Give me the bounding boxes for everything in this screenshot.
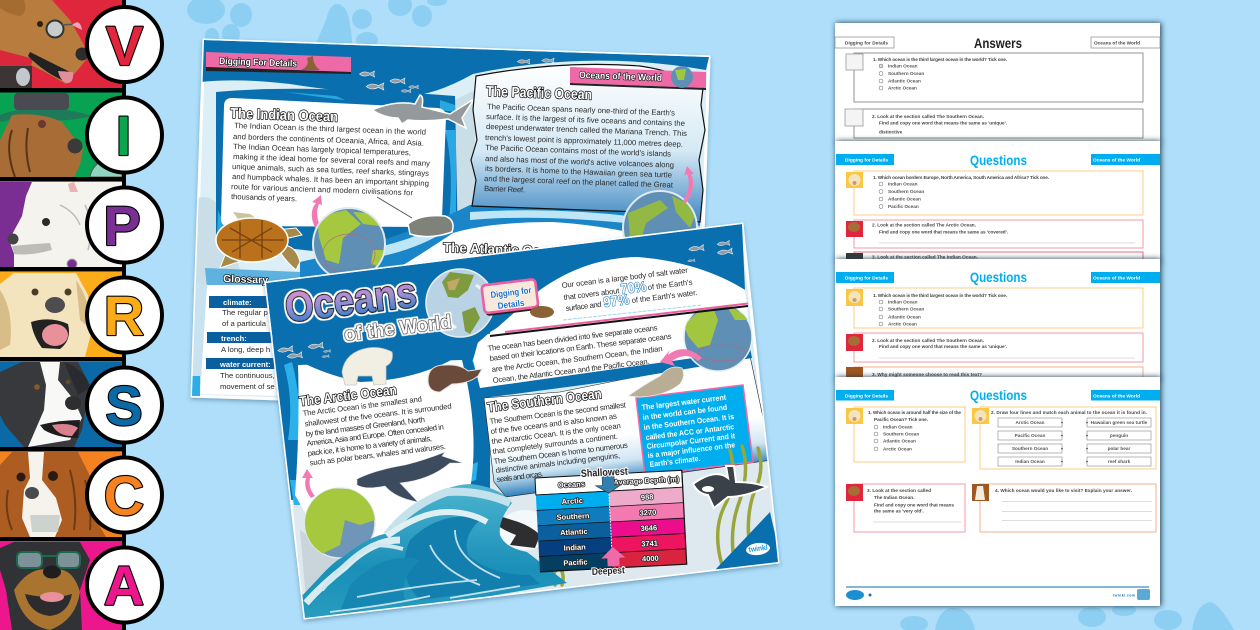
body text: pack ice, it is home to a variety of animals, bbox=[307, 434, 432, 458]
arrow: pink pointing left bbox=[660, 349, 702, 366]
question 2: matching: 2. Draw four lines and match each animal to the ocean it is found in. bbox=[991, 410, 1147, 415]
footer bbox=[846, 587, 1150, 600]
panel: VIPERS dog column bbox=[0, 0, 162, 630]
swirl frame behind Indian Ocean panel bbox=[216, 88, 458, 251]
question 1 bbox=[846, 288, 1143, 328]
text: ocean facts: 70% bbox=[619, 278, 648, 297]
badge S bbox=[87, 368, 162, 442]
badge: Digging for Details: Digging for bbox=[490, 285, 532, 300]
panel background bbox=[221, 98, 446, 227]
Atlantic Ocean white curve bbox=[404, 222, 624, 264]
question 1: Arctic Ocean bbox=[888, 322, 917, 326]
question 1: 1. Which ocean is around half the size of the bbox=[868, 410, 961, 415]
question 3 bbox=[846, 367, 1143, 381]
icon: kelp bbox=[553, 446, 761, 585]
tab: Digging for Details bbox=[836, 154, 894, 165]
row: Atlantic 3646 bbox=[538, 518, 685, 541]
badge V bbox=[87, 7, 162, 82]
question 2: matching bbox=[972, 407, 1156, 469]
banner bbox=[570, 66, 706, 90]
body text: The Indian Ocean is the third largest ocean in the world bbox=[234, 121, 426, 137]
body text: The Southern Ocean is the second smallest bbox=[489, 400, 627, 426]
arrow: blue down bbox=[595, 473, 622, 494]
body text: trench's lowest point is approximately 11,000 metres deep. bbox=[485, 133, 683, 149]
tab: Digging for Details: Digging for Details bbox=[845, 40, 888, 46]
icon: seal bbox=[628, 367, 684, 397]
header row: Average Depth (m) bbox=[613, 474, 680, 487]
question 1: Pacific Ocean bbox=[888, 204, 919, 209]
body text bbox=[489, 400, 628, 484]
callout: largest water current: Earth's climate. bbox=[649, 454, 701, 469]
table: average depth of oceans bbox=[535, 469, 687, 572]
question 2: matching: Arctic Ocean bbox=[1016, 420, 1045, 425]
body text: The Pacific Ocean spans nearly one-third of the Earth's bbox=[487, 102, 675, 118]
text: ocean facts: of the Earth's water. bbox=[631, 288, 698, 305]
tab: Oceans of the World bbox=[1091, 272, 1160, 283]
term: water current: water current: bbox=[219, 360, 271, 369]
question 1 answer: 1. Which ocean is the third largest ocean in the world? Tick one. bbox=[873, 57, 1007, 62]
badge P: P bbox=[103, 194, 141, 257]
question 4: 4. Which ocean would you like to visit? Explain your answer. bbox=[995, 488, 1132, 493]
body text: and borders the continents of Oceania, Africa, and Asia. bbox=[233, 132, 424, 148]
term: climate bbox=[209, 296, 268, 328]
badge C bbox=[87, 458, 162, 532]
icon: orca bbox=[693, 466, 767, 508]
dividers and spine bbox=[0, 0, 126, 630]
question 2 answer: Find and copy one word that means the same as 'unique'. bbox=[879, 120, 1007, 126]
icon: earth globe bbox=[426, 269, 494, 337]
tab: Digging for Details bbox=[836, 390, 894, 400]
callout: largest water current: The largest water current bbox=[641, 393, 727, 412]
question 3 bbox=[846, 484, 965, 532]
badge A bbox=[87, 548, 162, 622]
banner: Digging For Details bbox=[206, 52, 351, 74]
icon: polar bear bbox=[342, 348, 392, 385]
question 2: matching: Hawaiian green sea turtle bbox=[1091, 420, 1148, 425]
torn paper background bbox=[471, 64, 705, 222]
header row bbox=[535, 470, 683, 495]
question 1: Atlantic Ocean bbox=[888, 196, 921, 202]
badge: Digging for Details: Details bbox=[497, 298, 525, 311]
question 2: Find and copy one word that means the same as 'covered'. bbox=[879, 230, 1008, 234]
tab: Oceans of the World bbox=[1091, 37, 1160, 48]
body text: route for various ancient and modern civilisations for bbox=[231, 182, 414, 197]
body text: deepest underwater trench called the Mariana Trench. This bbox=[486, 122, 687, 138]
question 3: the same as 'very old'. bbox=[874, 508, 924, 514]
term: trench: A long, deep h bbox=[221, 345, 270, 354]
heading: The Pacific Ocean bbox=[486, 84, 592, 104]
band: red with dog wearing glasses bbox=[0, 0, 123, 88]
heading: The Indian Ocean bbox=[230, 106, 338, 126]
question 2 answer bbox=[845, 109, 1143, 138]
blue swirl frame bbox=[270, 320, 490, 505]
body text: and humpback whales. It has been an important shipping bbox=[232, 172, 429, 188]
top wave band bbox=[200, 40, 709, 96]
school of fish bbox=[360, 58, 555, 93]
question 3: 3. Why might someone choose to read this text? bbox=[872, 372, 982, 377]
question 2: 2. Look at the section called The Arctic Ocean. bbox=[872, 222, 976, 228]
body text bbox=[484, 102, 687, 194]
callout: largest water current: in the Southern Ocean. It is bbox=[643, 412, 735, 432]
body text: of the five oceans and is also known as bbox=[490, 412, 617, 436]
body text: by the land masses of Greenland, North bbox=[305, 415, 425, 438]
sheet base bbox=[266, 224, 778, 618]
title: Answers: Answers bbox=[974, 36, 1022, 51]
question 4 bbox=[972, 484, 1156, 532]
tab: Oceans of the World: Oceans of the World bbox=[1093, 394, 1140, 400]
text: ocean facts: 97% bbox=[602, 291, 631, 310]
panel: back reading sheet bbox=[192, 40, 709, 413]
question 2: Find and copy one word that means the same as 'unique'. bbox=[879, 344, 1007, 349]
term: trench: trench: bbox=[221, 334, 247, 343]
question 3 bbox=[846, 252, 1143, 264]
row: Southern 3270: 3270 bbox=[639, 508, 657, 518]
panel: questions sheet B bbox=[835, 259, 1160, 381]
arrow: pink bbox=[302, 469, 315, 498]
row: Arctic 988 bbox=[536, 487, 683, 510]
icon: globe Arctic Ocean bbox=[305, 488, 375, 558]
band: green with hound in a hat bbox=[0, 92, 123, 177]
band: pink with rottweiler in glasses bbox=[0, 542, 123, 630]
panel: The Arctic Ocean bbox=[295, 360, 474, 600]
question 2: matching: reef shark bbox=[1108, 459, 1131, 464]
body text: and also has most of the world's active volcanoes along bbox=[485, 154, 674, 170]
badge R bbox=[87, 278, 162, 352]
callout: largest water current: called the ACC or Antarctic bbox=[645, 422, 735, 442]
body text bbox=[302, 394, 452, 467]
text: ocean facts bbox=[561, 266, 698, 313]
term: water current bbox=[206, 358, 276, 391]
question 1: Indian Ocean bbox=[888, 182, 918, 186]
row: Atlantic 3646: Atlantic bbox=[560, 527, 588, 537]
tab: Oceans of the World: Oceans of the World bbox=[1094, 40, 1140, 46]
grey seabed rock bbox=[300, 530, 345, 600]
icon: sea turtle bbox=[216, 212, 302, 270]
body text: The Indian Ocean has largely tropical temperatures, bbox=[233, 142, 411, 157]
panel: The Indian Ocean bbox=[216, 95, 474, 287]
tab: Oceans of the World bbox=[1091, 154, 1160, 165]
row: Indian 3741: 3741 bbox=[641, 539, 658, 549]
row: Arctic 988: Arctic bbox=[561, 496, 583, 506]
question 2 bbox=[846, 220, 1143, 248]
title: Oceans: Oceans bbox=[282, 268, 419, 331]
question 2: matching: penguin bbox=[1110, 433, 1128, 438]
title: Questions: Questions bbox=[970, 269, 1027, 285]
panel: five oceans intro bbox=[473, 302, 752, 388]
body text: Barrier Reef. bbox=[484, 184, 525, 194]
badge V: V bbox=[106, 14, 143, 77]
question 1: 1. Which ocean is the third largest ocean in the world? Tick one. bbox=[873, 293, 1007, 298]
background coral bbox=[192, 90, 475, 290]
question 1: Indian Ocean bbox=[888, 300, 918, 304]
body text: The ocean has been divided into five separate oceans bbox=[487, 323, 658, 353]
body text: The Southern Ocean is home to numerous bbox=[493, 441, 628, 466]
term: water current: movement of se bbox=[220, 382, 275, 391]
panel: ocean intro dome bbox=[490, 257, 748, 336]
question 2: matching: Indian Ocean bbox=[1015, 459, 1045, 464]
question 2: matching: Southern Ocean bbox=[1012, 446, 1048, 451]
tab: Oceans of the World: Oceans of the World bbox=[1093, 158, 1140, 164]
row: Southern 3270: Southern bbox=[556, 511, 590, 522]
panel: questions sheet A bbox=[835, 141, 1160, 264]
top blue band bbox=[266, 224, 745, 382]
label: Deepest: Deepest bbox=[592, 565, 626, 578]
badge S: S bbox=[105, 374, 143, 437]
panel background bbox=[295, 360, 474, 565]
callout: largest water current: Circumpolar Current and it bbox=[646, 431, 736, 451]
band: blue with border collie bbox=[0, 362, 123, 447]
question 1: Atlantic Ocean bbox=[888, 314, 921, 320]
body text: making it the ideal home for several coral reefs and many bbox=[233, 152, 430, 168]
text: ocean facts: Our ocean is a large body of salt water bbox=[561, 266, 689, 290]
swirl band bbox=[480, 348, 752, 398]
icon: penguin bbox=[493, 510, 551, 550]
title: Questions: Questions bbox=[970, 387, 1027, 403]
icon: globe Pacific Ocean bbox=[622, 190, 698, 238]
arrow: pink curved bbox=[683, 166, 694, 203]
question 1 answer: Atlantic Ocean bbox=[888, 78, 921, 84]
heading: The Southern Ocean bbox=[487, 386, 603, 415]
sheet base bbox=[192, 40, 709, 413]
banner: Oceans of the World bbox=[579, 70, 662, 84]
corner with logo: twinkl bbox=[748, 543, 768, 554]
badge C: C bbox=[104, 464, 144, 527]
question 1 answer bbox=[846, 53, 1143, 102]
seabed bbox=[290, 440, 790, 625]
body text: and the largest coral reef on the planet called the Great bbox=[484, 174, 674, 190]
title: Questions: Questions bbox=[970, 152, 1027, 168]
tab: Digging for Details: Digging for Details bbox=[845, 394, 888, 400]
row: Arctic 988: 988 bbox=[641, 492, 654, 502]
label: Shallowest: Shallowest bbox=[581, 466, 629, 480]
term: climate: The regular p bbox=[222, 308, 268, 317]
tab: Digging for Details: Digging for Details bbox=[845, 276, 888, 282]
body text bbox=[231, 121, 430, 203]
body text: its borders. It is home to the Hawaiian green sea turtle bbox=[485, 164, 672, 180]
icon: great wave bbox=[298, 484, 567, 625]
arrow: pink up bbox=[601, 546, 626, 567]
icon: reef shark bbox=[372, 95, 474, 128]
body text: surface. It is the largest of its five oceans and contains the bbox=[486, 112, 685, 128]
heading: Glossary bbox=[223, 273, 268, 286]
panel: answers sheet bbox=[835, 23, 1160, 143]
icon: stingray bbox=[377, 197, 453, 237]
text: ocean facts: surface and bbox=[565, 300, 602, 313]
question 1 answer: Indian Ocean bbox=[888, 64, 918, 68]
question 1: 1. Which ocean borders Europe, North America, South America and Africa? Tick one. bbox=[873, 175, 1049, 180]
question 2 answer: distinctive bbox=[879, 130, 903, 134]
question 1: Southern Ocean bbox=[888, 306, 924, 312]
row: Atlantic 3646: 3646 bbox=[640, 523, 657, 533]
row: Southern 3270 bbox=[537, 503, 684, 526]
body text: thousands of years. bbox=[231, 192, 297, 203]
callout: largest water current bbox=[636, 385, 753, 475]
callout: largest water current: in the world can be found bbox=[642, 403, 728, 422]
body text: based on their locations on Earth. These separate oceans bbox=[489, 332, 672, 363]
text: ocean facts: of the Earth's bbox=[647, 278, 693, 292]
body text: distinctive animals including penguins, bbox=[495, 451, 620, 475]
badge I: I bbox=[116, 104, 131, 167]
question 2: matching: Pacific Ocean bbox=[1015, 433, 1046, 438]
title: Oceans of the World bbox=[282, 268, 453, 346]
body text: are the Arctic Ocean, the Southern Ocean, the Indian bbox=[491, 344, 663, 374]
band: yellow with golden retriever bbox=[0, 272, 123, 357]
body text bbox=[487, 323, 672, 385]
tab: Digging for Details bbox=[835, 37, 894, 48]
term: climate: climate: bbox=[223, 298, 252, 307]
row: Indian 3741: Indian bbox=[563, 542, 586, 553]
icon: globe five oceans bbox=[684, 303, 752, 371]
header row: Oceans bbox=[558, 479, 585, 490]
arrow: pink up to text bbox=[312, 195, 322, 228]
body text: shallowest of the five oceans. It is surrounded bbox=[304, 402, 452, 428]
question 1 bbox=[846, 171, 1143, 215]
panel: The Pacific Ocean bbox=[470, 64, 706, 238]
question 1: Pacific Ocean? Tick one. bbox=[874, 417, 928, 422]
question 1 answer: Southern Ocean bbox=[888, 71, 924, 76]
row: Indian 3741 bbox=[538, 533, 686, 556]
heading: The Arctic Ocean bbox=[299, 382, 398, 409]
body text: Ocean, the Atlantic Ocean and the Pacific Ocean. bbox=[492, 357, 650, 385]
band: orange with spaniel bbox=[0, 452, 123, 537]
icon: globe Indian Ocean bbox=[312, 207, 386, 274]
tab: Oceans of the World bbox=[1091, 390, 1160, 400]
body text: the Antarctic Ocean. It is the only ocean bbox=[491, 421, 621, 446]
body text: that completely surrounds a continent. bbox=[492, 432, 618, 456]
band: purple with white dog bbox=[0, 182, 123, 269]
panel: front cover sheet bbox=[266, 224, 790, 625]
tab: Digging for Details bbox=[836, 272, 894, 283]
row: Pacific 4000: Pacific bbox=[563, 557, 588, 568]
question 3: The Indian Ocean. bbox=[874, 495, 914, 500]
question 2: 2. Look at the section called The Southern Ocean. bbox=[872, 338, 984, 343]
question 1 bbox=[846, 407, 965, 462]
term: climate: of a particula bbox=[222, 319, 267, 328]
panel: Glossary bbox=[192, 268, 300, 396]
body text: The Pacific Ocean contains most of the world's islands bbox=[485, 143, 671, 158]
icon: walrus bbox=[428, 365, 482, 392]
question 3: 3. Look at the section called The Indian Ocean. bbox=[872, 254, 978, 260]
question 2: matching: polar bear bbox=[1108, 446, 1131, 451]
question 3: Find and copy one word that means bbox=[874, 502, 954, 508]
row: Pacific 4000 bbox=[539, 549, 687, 572]
banner: Digging For Details: Digging For Details bbox=[219, 56, 297, 70]
question 2 answer: 2. Look at the section called The Southern Ocean. bbox=[872, 114, 984, 119]
row: Pacific 4000: 4000 bbox=[642, 554, 659, 564]
term: trench bbox=[207, 332, 277, 354]
torn paper background bbox=[484, 356, 772, 497]
text: ocean facts: that covers about bbox=[563, 286, 621, 302]
callout: largest water current: is a major influence on the bbox=[647, 440, 736, 460]
divider bbox=[490, 306, 748, 336]
body text: The Arctic Ocean is the smallest and bbox=[302, 394, 422, 418]
footer: twinkl.com bbox=[1113, 594, 1135, 598]
lower swirl bbox=[300, 205, 700, 278]
body text: America, Asia and Europe. Often concealed in bbox=[306, 422, 444, 448]
question 1: Southern Ocean bbox=[888, 189, 924, 194]
badge R: R bbox=[104, 284, 144, 347]
question 1: Southern Ocean bbox=[883, 432, 919, 436]
panel: questions sheet C bbox=[835, 377, 1160, 606]
heading: The Atlantic Ocean: The Atlantic Ocean bbox=[443, 240, 563, 259]
body text: unique animals, such as sea turtles, reef sharks, stingrays bbox=[232, 162, 429, 178]
body text: seals and orcas. bbox=[496, 469, 544, 484]
tab: Digging for Details: Digging for Details bbox=[845, 158, 888, 164]
question 3: 3. Look at the section called bbox=[867, 488, 931, 493]
tab: Oceans of the World: Oceans of the World bbox=[1093, 276, 1140, 282]
panel: The Southern Ocean with fact box bbox=[480, 348, 772, 497]
question 1: Indian Ocean bbox=[883, 424, 913, 430]
question 1: Atlantic Ocean bbox=[883, 438, 916, 444]
icon: humpback whale bbox=[357, 452, 463, 502]
question 1 answer: Arctic Ocean bbox=[888, 86, 917, 90]
question 1: Arctic Ocean bbox=[883, 446, 912, 452]
school of fish bbox=[278, 341, 331, 364]
term: water current: The continuous, bbox=[220, 371, 275, 380]
body text: such as polar bears, whales and walruses. bbox=[309, 442, 446, 467]
question 2 bbox=[846, 333, 1143, 362]
corner with logo bbox=[715, 512, 782, 570]
badge: Digging for Details bbox=[481, 279, 554, 318]
badge I bbox=[87, 98, 162, 172]
badge A: A bbox=[104, 554, 144, 617]
school of fish bbox=[686, 240, 733, 263]
subtitle: of the World: of the World bbox=[343, 312, 453, 346]
badge P bbox=[87, 188, 162, 262]
